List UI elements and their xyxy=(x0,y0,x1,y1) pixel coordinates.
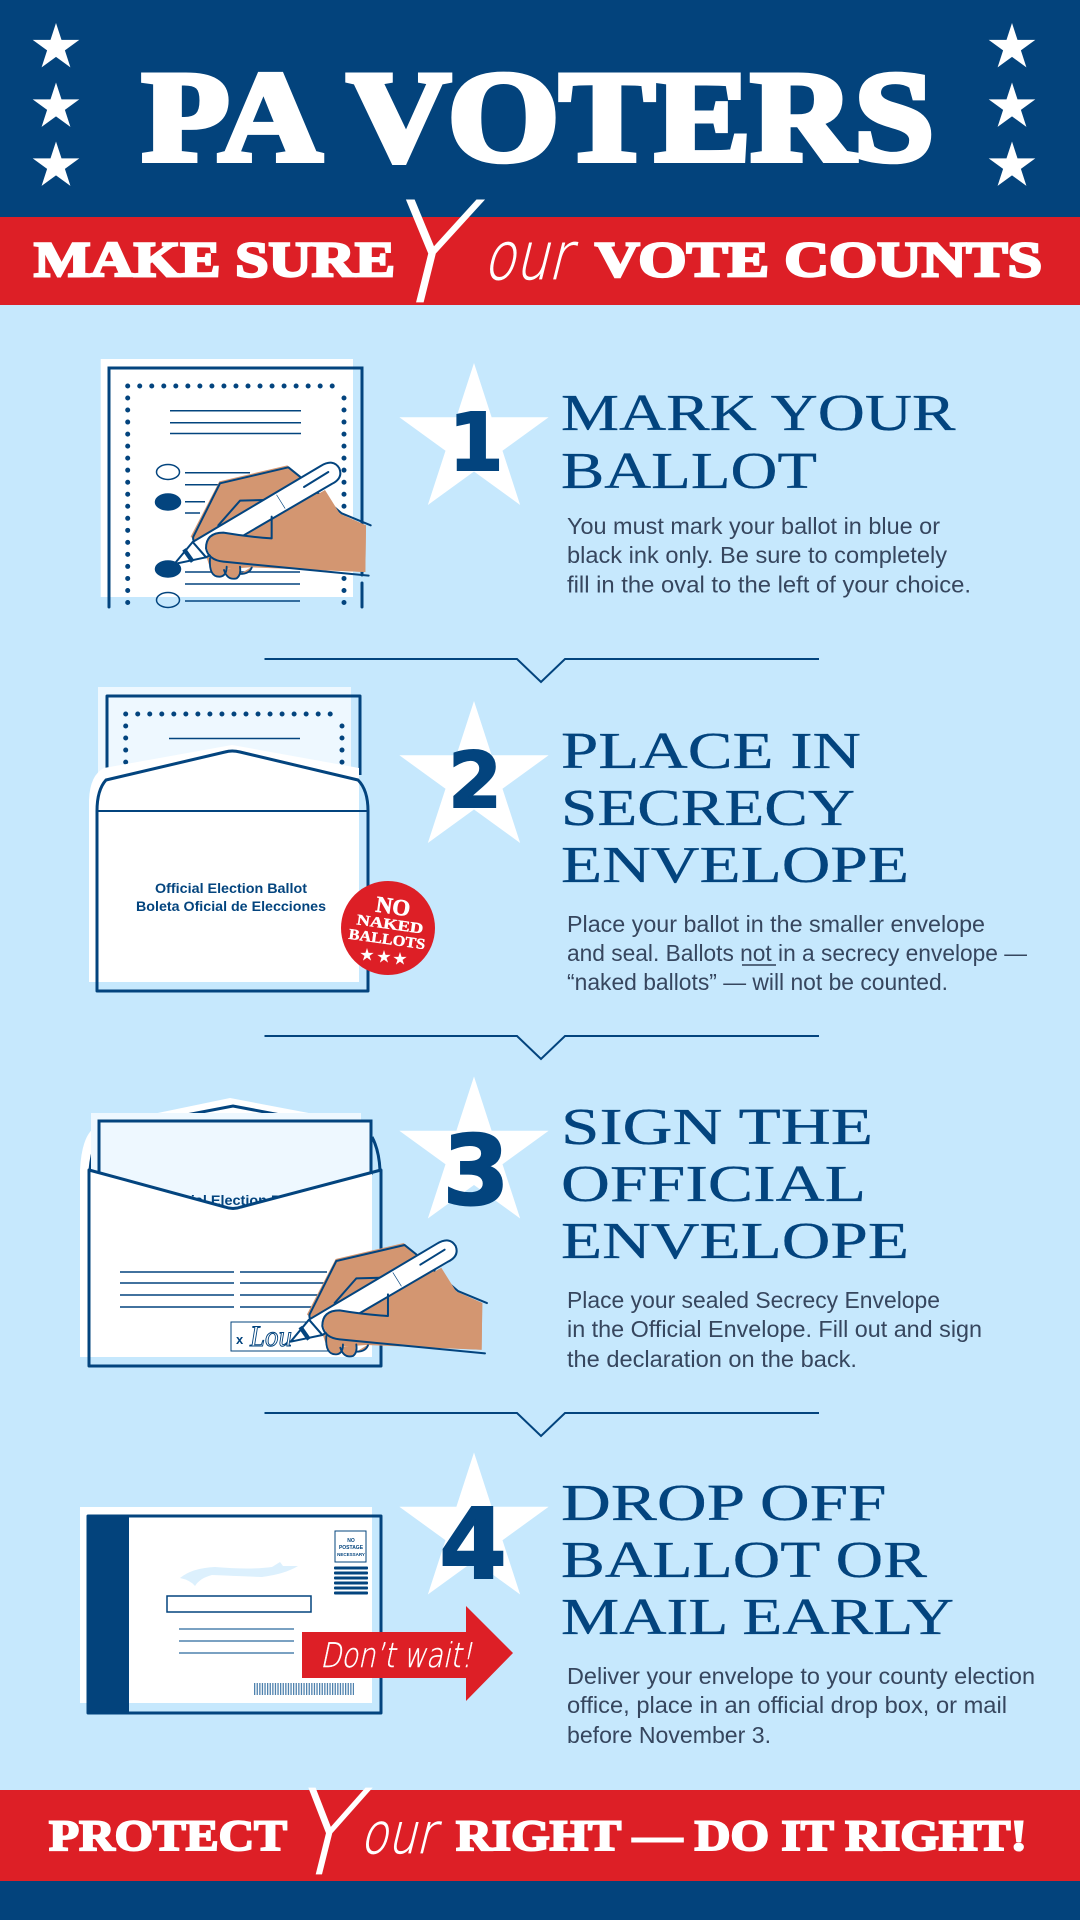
footer script word: our xyxy=(357,1802,447,1867)
secrecy envelope inserted xyxy=(99,1121,371,1211)
address box xyxy=(167,1596,311,1612)
signature box: Lou xyxy=(249,1320,292,1353)
secrecy envelope inserted: Official Election Ballot xyxy=(158,1192,311,1208)
subtitle banner xyxy=(0,172,1080,335)
step 2 star number xyxy=(399,701,549,843)
step 4 illustration: mail envelope xyxy=(80,1507,513,1713)
step 2 heading xyxy=(561,723,909,894)
subtitle right: VOTE COUNTS xyxy=(595,231,1042,287)
step 3 heading: OFFICIAL xyxy=(561,1156,866,1213)
step 1 text: black ink only. Be sure to completely xyxy=(567,542,948,568)
signature swoosh xyxy=(180,1562,298,1586)
step 1 heading: BALLOT xyxy=(561,443,817,500)
postage box: NO xyxy=(347,1538,355,1544)
step 4 text: Deliver your envelope to your county election xyxy=(567,1663,1035,1689)
step 3 star number xyxy=(399,1076,549,1227)
badge: no naked ballots: NO xyxy=(374,892,412,921)
step 4 text xyxy=(567,1663,1035,1748)
step 2 illustration: secrecy envelope xyxy=(89,687,435,991)
envelope white backing xyxy=(80,1098,372,1357)
icon: hand with pen xyxy=(174,463,371,579)
postage box: NECESSARY xyxy=(337,1552,365,1557)
step 4 heading: BALLOT OR xyxy=(561,1532,927,1589)
step 1 star number xyxy=(399,363,549,505)
envelope label xyxy=(136,880,326,914)
subtitle left: MAKE SURE xyxy=(34,231,395,287)
footer right: RIGHT — DO IT RIGHT! xyxy=(456,1813,1027,1860)
envelope xyxy=(89,745,368,991)
subtitle script word: Y xyxy=(370,172,494,335)
ballot option ovals xyxy=(156,464,180,608)
barcode xyxy=(254,1683,354,1695)
envelope back flap xyxy=(90,1106,380,1170)
postage box: POSTAGE xyxy=(339,1545,364,1551)
step 4 text: before November 3. xyxy=(567,1722,771,1748)
arrow: don't wait: Don’t wait! xyxy=(318,1636,479,1676)
title second word: VOTERS xyxy=(347,45,934,188)
step 3 heading: ENVELOPE xyxy=(561,1213,909,1270)
envelope label: Boleta Oficial de Elecciones xyxy=(136,898,326,914)
step 2 heading: ENVELOPE xyxy=(561,837,909,894)
icon: hand with pen xyxy=(291,1240,487,1356)
ballot header lines xyxy=(170,411,301,434)
step 1 heading xyxy=(561,385,956,500)
step 1 text: You must mark your ballot in blue or xyxy=(567,513,940,539)
step 2 star number: 2 xyxy=(448,737,502,826)
badge: no naked ballots xyxy=(341,881,435,975)
step 3 heading xyxy=(561,1099,909,1270)
step 1 star number: 1 xyxy=(449,397,503,489)
footer script word xyxy=(278,1766,447,1903)
arrow: don't wait xyxy=(302,1606,513,1701)
step 3 text: the declaration on the back. xyxy=(567,1346,857,1372)
subtitle script word: our xyxy=(479,218,585,295)
header banner xyxy=(0,0,1080,217)
footer left: PROTECT xyxy=(49,1813,287,1860)
ballot dotted border xyxy=(128,386,344,606)
step 4 star number xyxy=(399,1452,549,1601)
step 2 heading: PLACE IN xyxy=(561,723,861,780)
step 2 text xyxy=(567,911,1027,995)
ballot behind envelope xyxy=(98,687,360,782)
step 2 text: and seal. Ballots not in a secrecy envelope — xyxy=(567,940,1027,966)
step 2 text: Place your ballot in the smaller envelope xyxy=(567,911,985,937)
step 4 text: office, place in an official drop box, or mail xyxy=(567,1692,1007,1718)
step 3 star number: 3 xyxy=(443,1115,509,1227)
step 1 illustration: ballot and hand xyxy=(101,359,371,608)
badge: no naked ballots: BALLOTS xyxy=(348,927,426,953)
signature box xyxy=(231,1320,334,1353)
postage box xyxy=(335,1531,366,1562)
envelope front pocket xyxy=(89,1170,381,1366)
right stars xyxy=(989,23,1035,186)
step 1 text xyxy=(567,513,971,598)
envelope label: Official Election Ballot xyxy=(155,880,307,896)
signature box: x xyxy=(236,1332,244,1347)
declaration lines xyxy=(120,1272,327,1307)
step 1 heading: MARK YOUR xyxy=(561,385,956,442)
step 3 text: Place your sealed Secrecy Envelope xyxy=(567,1287,940,1313)
footer script word: Y xyxy=(278,1766,380,1903)
step 3 illustration: official envelope being signed xyxy=(80,1098,487,1366)
step 4 heading: DROP OFF xyxy=(561,1475,886,1532)
step 2 text: “naked ballots” — will not be counted. xyxy=(567,969,948,995)
footer banner xyxy=(0,1766,1080,1920)
badge: no naked ballots: NAKED xyxy=(356,912,424,938)
step 3 text xyxy=(567,1287,982,1372)
step 3 text: in the Official Envelope. Fill out and sign xyxy=(567,1316,982,1342)
subtitle script word xyxy=(370,172,585,335)
step 2 heading: SECRECY xyxy=(561,780,855,837)
left stars xyxy=(33,23,79,186)
postage bars xyxy=(334,1566,368,1594)
step 1 text: fill in the oval to the left of your choice. xyxy=(567,572,971,598)
envelope band xyxy=(88,1516,129,1713)
step 4 heading: MAIL EARLY xyxy=(561,1589,954,1646)
inner ballot shading xyxy=(91,1113,361,1183)
step 4 heading xyxy=(561,1475,954,1646)
ballot option lines xyxy=(185,473,300,601)
step 3 heading: SIGN THE xyxy=(561,1099,873,1156)
address lines xyxy=(179,1629,294,1653)
title: PA xyxy=(142,45,322,188)
step 4 star number: 4 xyxy=(439,1488,507,1601)
